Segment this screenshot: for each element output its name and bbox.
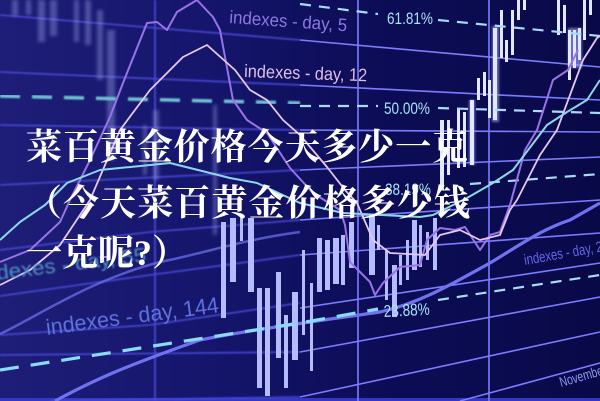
pink moving average: day 12	[0, 36, 600, 285]
candlesticks: right group	[440, 0, 592, 190]
label: 38.19%: 38.19%	[385, 180, 431, 199]
title line 2: （今天菜百黄金价格多少钱	[26, 183, 470, 223]
label: 23.88%: 23.88%	[383, 300, 430, 321]
title line 1: 菜百黄金价格今天多少一克	[26, 127, 468, 167]
label: indexes day 12: indexes - day, 12	[244, 61, 367, 85]
blue trend curve: indexes day 200	[0, 203, 600, 401]
label: 61.81%: 61.81%	[387, 9, 433, 28]
label: 50.00%: 50.00%	[384, 99, 430, 118]
cyan moving average	[0, 80, 600, 240]
candlesticks: left blurred group	[12, 0, 217, 235]
candlesticks: right group glow	[469, 26, 582, 165]
candlesticks: centre group	[221, 215, 437, 396]
purple moving average: day 5	[0, 0, 578, 295]
label: indexes day 144: indexes - day, 144	[44, 292, 220, 340]
title line 3: 一克呢?）	[26, 233, 188, 273]
label: indexes day 5: indexes - day, 5	[229, 7, 348, 35]
